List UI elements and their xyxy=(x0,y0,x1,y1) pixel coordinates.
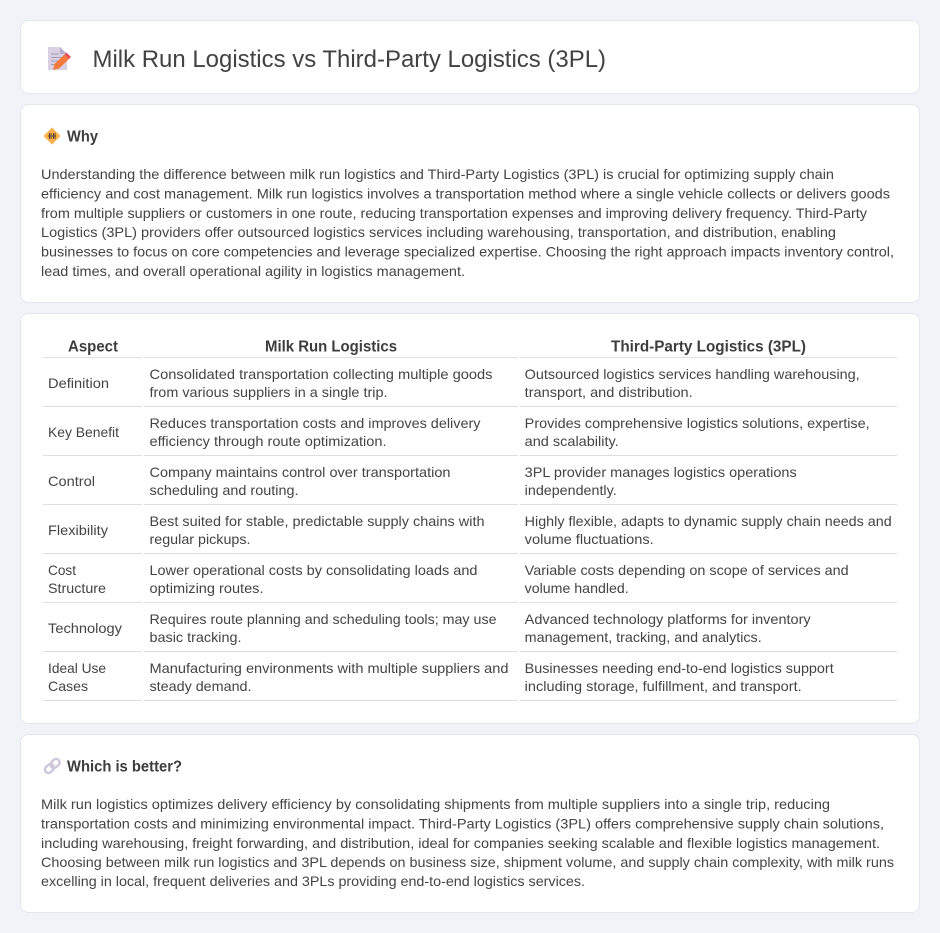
panel: title card xyxy=(20,20,920,94)
row: control: Control xyxy=(48,473,95,489)
row: technology: Requires route planning and scheduling tools; may use xyxy=(150,611,497,627)
row: control: Company maintains control over transportation xyxy=(150,464,450,480)
row: flexibility: Flexibility xyxy=(48,522,108,538)
table header xyxy=(68,338,806,356)
row: cost structure: volume handled. xyxy=(525,580,629,596)
row: cost structure: Lower operational costs by consolidating loads and xyxy=(150,562,477,578)
row: flexibility xyxy=(48,513,892,547)
row: flexibility: Highly flexible, adapts to dynamic supply chain needs and xyxy=(525,513,892,529)
why paragraph: Logistics (3PL) providers offer outsourced logistics services including warehousing, transportation, and distribution, enabling xyxy=(41,224,836,240)
row: definition: Outsourced logistics services handling warehousing, xyxy=(525,366,860,382)
row: ideal use cases: including storage, fulfillment, and transport. xyxy=(525,678,802,694)
row: cost structure xyxy=(48,562,849,596)
row: key benefit: Reduces transportation costs and improves delivery xyxy=(150,415,480,431)
row: key benefit: efficiency through route optimization. xyxy=(150,433,386,449)
row: technology xyxy=(48,611,811,645)
row: ideal use cases: Cases xyxy=(48,678,88,694)
why paragraph: lead times, and overall operational agility in logistics management. xyxy=(41,263,465,279)
panel: why xyxy=(20,104,920,302)
row: control xyxy=(48,464,797,498)
row: key benefit xyxy=(48,415,870,449)
heading: why: Why xyxy=(67,128,98,146)
row: ideal use cases: Businesses needing end-to-end logistics support xyxy=(525,660,834,676)
why paragraph xyxy=(41,166,894,279)
row: control: 3PL provider manages logistics operations xyxy=(525,464,797,480)
title: Milk Run Logistics vs Third-Party Logistics (3PL) xyxy=(92,46,606,73)
which is better paragraph: Choosing between milk run logistics and 3PL depends on business size, shipment volume, and supply chain complexity, with milk runs xyxy=(41,854,894,870)
row: ideal use cases xyxy=(48,660,834,694)
panel: comparison table xyxy=(20,314,920,724)
row: key benefit: Key Benefit xyxy=(48,424,119,440)
heading: which is better: Which is better? xyxy=(67,758,182,776)
row: ideal use cases: Ideal Use xyxy=(48,660,106,676)
row: cost structure: optimizing routes. xyxy=(150,580,264,596)
row: control: scheduling and routing. xyxy=(150,482,298,498)
row: key benefit: Provides comprehensive logistics solutions, expertise, xyxy=(525,415,870,431)
which is better paragraph xyxy=(41,796,894,889)
which is better paragraph: transportation costs and minimizing environmental impact. Third-Party Logistics (3PL) offers comprehensive supply chain solutions, xyxy=(41,815,884,831)
row: control: independently. xyxy=(525,482,617,498)
row: technology: management, tracking, and analytics. xyxy=(525,629,762,645)
row: definition: from various suppliers in a single trip. xyxy=(150,384,388,400)
row: cost structure: Structure xyxy=(48,580,106,596)
panel: which is better xyxy=(20,734,920,912)
icon: document with pencil xyxy=(48,47,71,70)
row: flexibility: volume fluctuations. xyxy=(525,531,654,547)
row: key benefit: and scalability. xyxy=(525,433,619,449)
why paragraph: Understanding the difference between milk run logistics and Third-Party Logistics (3PL) is crucial for optimizing supply chain xyxy=(41,166,834,182)
row: ideal use cases: Manufacturing environments with multiple suppliers and xyxy=(150,660,508,676)
icon: chain link xyxy=(43,757,61,775)
row: definition xyxy=(48,366,860,400)
row: cost structure: Cost xyxy=(48,562,76,578)
row: technology: Technology xyxy=(48,620,122,636)
which is better paragraph: excelling in local, frequent deliveries and 3PLs providing end-to-end logistics services. xyxy=(41,873,585,889)
why paragraph: efficiency and cost management. Milk run logistics involves a transportation method where a single vehicle collects or delivers goods xyxy=(41,185,890,201)
why paragraph: businesses to focus on core competencies and leverage specialized expertise. Choosing the right approach impacts inventory control, xyxy=(41,244,894,260)
icon: diamond sign xyxy=(44,128,60,144)
row: cost structure: Variable costs depending on scope of services and xyxy=(525,562,849,578)
row: definition: Consolidated transportation collecting multiple goods xyxy=(150,366,492,382)
why paragraph: from multiple suppliers or customers in one route, reducing transportation expenses and improving delivery frequency. Third-Party xyxy=(41,205,867,221)
row: ideal use cases: steady demand. xyxy=(150,678,252,694)
table header: Aspect xyxy=(68,338,119,356)
which is better paragraph: Milk run logistics optimizes delivery efficiency by consolidating shipments from multiple suppliers into a single trip, reducing xyxy=(41,796,830,812)
row: flexibility: regular pickups. xyxy=(150,531,250,547)
row: definition: Definition xyxy=(48,375,109,391)
row: technology: Advanced technology platforms for inventory xyxy=(525,611,811,627)
which is better paragraph: including warehousing, freight forwarding, and distribution, ideal for companies seeking scalable and flexible logistics management. xyxy=(41,835,880,851)
row: flexibility: Best suited for stable, predictable supply chains with xyxy=(150,513,484,529)
row: definition: transport, and distribution. xyxy=(525,384,693,400)
table header: Milk Run Logistics xyxy=(265,338,397,356)
row: technology: basic tracking. xyxy=(150,629,242,645)
table header: Third-Party Logistics (3PL) xyxy=(611,338,806,356)
